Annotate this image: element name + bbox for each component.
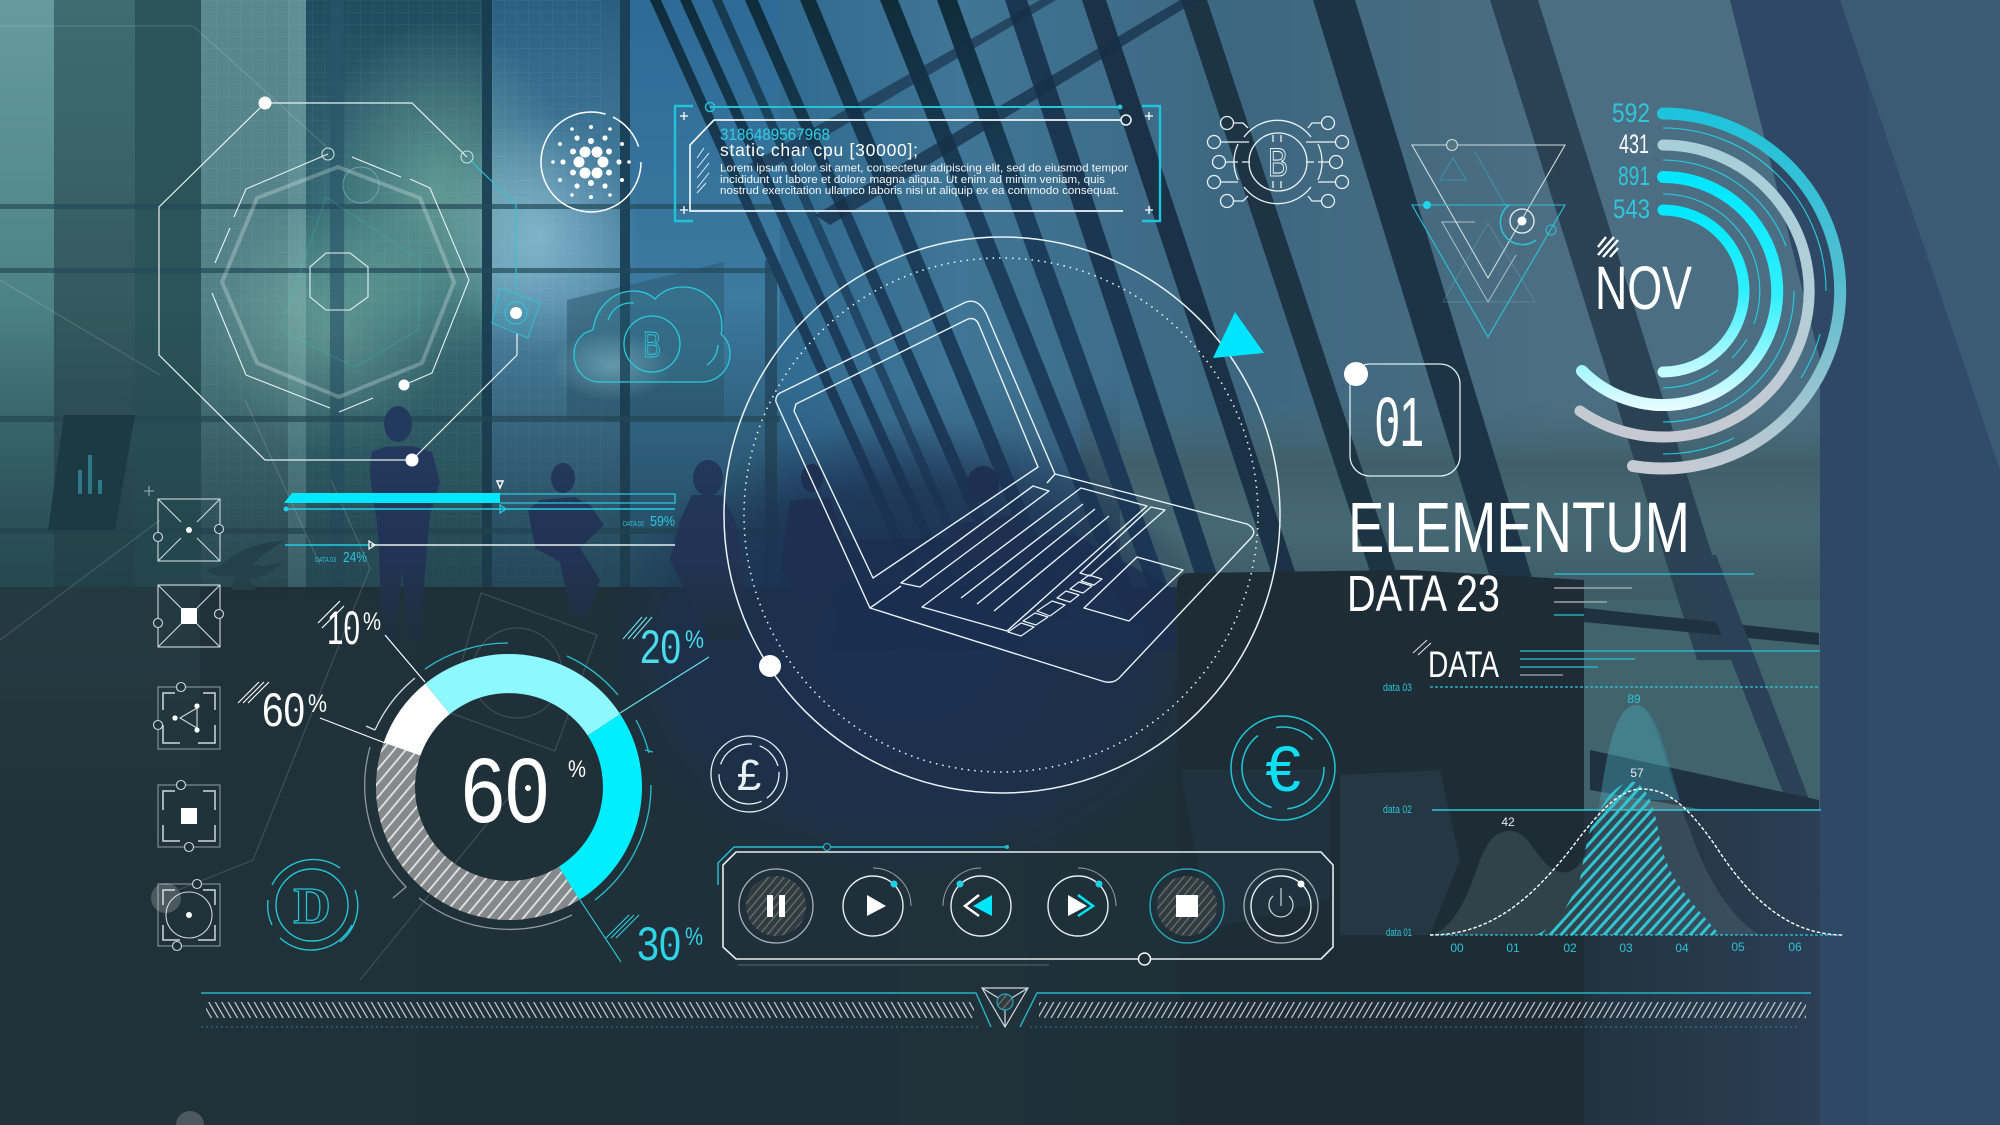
progress bars: DATA 02 [623, 521, 644, 528]
segment: hatched [376, 743, 580, 920]
icon: pound coin [711, 736, 787, 812]
area chart: DATA: 03 [1619, 941, 1633, 955]
label 30%: % [685, 923, 703, 951]
triangle diagram [1412, 140, 1565, 337]
label 60%: % [308, 690, 327, 718]
area chart: DATA: 04 [1675, 941, 1689, 955]
code text panel: incididunt ut labore et dolore magna aliqua. Ut enim ad minim veniam, quis [720, 174, 1106, 186]
ring values: 592 [1612, 98, 1650, 128]
potted plant [205, 540, 285, 590]
area chart: DATA: 01 [1506, 941, 1520, 955]
area chart: DATA: 06 [1788, 940, 1802, 954]
icon: bracket with circle [151, 880, 220, 950]
label 10%: 10 [327, 601, 360, 654]
icon: pound coin: £ [737, 751, 761, 800]
area chart: DATA [1383, 640, 1843, 955]
label 20% [620, 617, 709, 713]
progress bars: 24% [343, 549, 367, 566]
area chart: DATA: 42 [1501, 815, 1515, 829]
bottom hatched bar with emblem [201, 988, 1811, 1027]
code text panel: 3186489567968 [720, 125, 830, 144]
silhouette: standing man [370, 406, 440, 640]
progress bars: 59% [650, 513, 675, 530]
icon: square with block [154, 585, 224, 647]
button: pause [739, 869, 813, 943]
icon: dogecoin D: D [293, 878, 331, 935]
silhouette: woman [670, 460, 745, 640]
button: play [843, 868, 911, 936]
progress bars [284, 481, 675, 566]
month label: NOV [1595, 254, 1692, 322]
button: forward [1048, 868, 1116, 936]
area chart: DATA: 05 [1731, 940, 1745, 954]
center value: 60 [461, 740, 549, 842]
area chart: DATA: 02 [1563, 941, 1577, 955]
label 20%: % [685, 626, 704, 654]
code text panel: static char cpu [30000]; [720, 140, 918, 160]
number badge 01: 01 [1375, 383, 1424, 461]
left icon column [144, 486, 224, 950]
code text panel: nostrud exercitation ullamco laboris nisi ut aliquip ex ea commodo consequat. [720, 185, 1119, 197]
icon: triangle nodes [154, 682, 220, 749]
icon: bracket with block [158, 780, 220, 852]
laptop outline [776, 301, 1254, 682]
progress bars: DATA 03 [315, 557, 336, 564]
button: stop [1150, 869, 1224, 943]
ring values: 891 [1618, 161, 1650, 191]
radial chart NOV [1580, 98, 1840, 468]
area chart: DATA: 00 [1450, 941, 1464, 955]
icon: cardano coin [541, 112, 641, 212]
donut outer arcs [365, 643, 653, 929]
icon: square with dot [154, 499, 224, 561]
hatched square [1598, 237, 1618, 257]
icon: bitcoin chip: B [1268, 141, 1288, 185]
icon: bitcoin chip [1208, 116, 1348, 208]
ring values [1612, 98, 1650, 224]
button: rewind [943, 868, 1011, 936]
label 60%: 60 [262, 683, 305, 736]
donut chart: % [568, 756, 586, 783]
area chart: DATA: data 01 [1386, 927, 1412, 939]
icon: bitcoin cloud [574, 287, 730, 382]
label 60% [238, 682, 385, 743]
area chart: DATA: data 02 [1383, 804, 1412, 816]
media control panel [718, 844, 1333, 965]
code text panel [675, 102, 1160, 221]
faint background lines [0, 26, 597, 1125]
silhouette: seated person [528, 463, 604, 622]
title: DATA 23 [1347, 565, 1500, 622]
silhouette: people at table [780, 464, 1035, 600]
area chart: DATA: data 03 [1383, 682, 1412, 694]
emblem [982, 988, 1028, 1027]
laptop in circle [724, 237, 1280, 793]
label 30% [580, 900, 703, 970]
button: power [1244, 869, 1318, 943]
segment: light cyan [425, 654, 620, 736]
easel board [48, 415, 135, 530]
area chart: DATA: 89 [1627, 692, 1641, 706]
arrow: cyan triangle [1213, 312, 1264, 358]
label 10% [318, 601, 425, 682]
title: ELEMENTUM [1348, 489, 1690, 568]
label 30%: 30 [637, 917, 681, 970]
icon: euro coin: € [1265, 733, 1301, 805]
segment: cyan [559, 714, 642, 900]
icon: dogecoin D [268, 859, 358, 950]
area chart: DATA: 57 [1630, 766, 1644, 780]
donut chart [238, 601, 709, 970]
label 20%: 20 [640, 620, 681, 673]
title [1347, 489, 1754, 622]
label 10%: % [363, 608, 381, 636]
segment: white [384, 684, 450, 756]
area chart: DATA: DATA [1428, 644, 1499, 685]
code text panel: Lorem ipsum dolor sit amet, consectetur adipiscing elit, sed do eiusmod tempor [720, 162, 1128, 174]
icon: euro coin [1231, 716, 1335, 820]
ring values: 543 [1613, 194, 1650, 224]
number badge 01 [1344, 362, 1460, 476]
octagon network diagram [159, 96, 540, 466]
icon: bitcoin cloud: B [643, 324, 661, 365]
ring values: 431 [1619, 129, 1649, 159]
